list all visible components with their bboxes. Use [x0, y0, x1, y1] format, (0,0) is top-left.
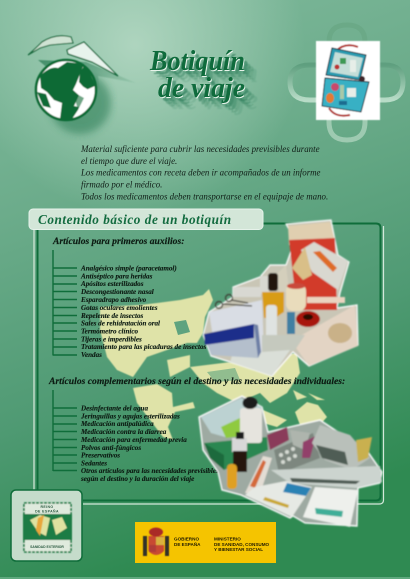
small vials — [266, 305, 277, 343]
photo: first aid supplies — [203, 220, 358, 376]
logo: globe with wings — [28, 36, 136, 134]
syringe packs — [271, 466, 382, 488]
list 1 text: Tijeras e imperdibles — [81, 336, 142, 344]
blue sheet — [245, 481, 312, 517]
photo: open first-aid bag — [316, 41, 380, 120]
intro text: firmado por el médico. — [81, 180, 162, 190]
yellow vial — [227, 464, 237, 489]
title shadow: de viaje — [171, 85, 258, 116]
title shadow: de viaje — [168, 82, 255, 114]
white box with scissors — [209, 300, 264, 352]
green box — [204, 437, 268, 470]
list 1 text: Tratamiento para las picaduras de insectos — [81, 343, 207, 351]
seal: sanidad exterior: REINO — [40, 505, 54, 509]
tape roll — [286, 284, 306, 311]
government logo — [135, 522, 276, 563]
heading: primeros auxilios: Artículos para primeros auxilios: — [52, 236, 184, 247]
intro text: Todos los medicamentos deben transportarse en el equipaje de mano. — [81, 192, 328, 202]
white outline silhouette — [199, 396, 382, 526]
coat of arms — [143, 528, 169, 556]
heading: complementarios: Artículos complementarios según el destino y las necesidades individuales: — [48, 376, 345, 387]
list 2 text: Medicación antipalúdica — [80, 420, 154, 428]
list 2 text: Polvos anti-fúngicos — [81, 444, 141, 452]
seal: sanidad exterior: DE ESPAÑA — [35, 508, 59, 514]
header: contenido básico: Contenido básico de un botiquín — [38, 212, 232, 227]
red disk — [296, 311, 320, 327]
small dark bottle — [232, 438, 247, 452]
title: de viaje — [159, 74, 246, 105]
gov text — [174, 536, 270, 552]
frame — [34, 224, 384, 504]
list 1 text: Analgésico simple (paracetamol) — [80, 264, 177, 272]
title shadow: de viaje — [165, 80, 252, 111]
title shadow — [153, 50, 258, 116]
intro text: Material suficiente para cubrir las necesidades previsibles durante — [80, 144, 320, 154]
blister packs — [267, 427, 289, 450]
title shadow: Botiquín — [153, 50, 249, 81]
list 1 text: Apósitos esterilizados — [80, 280, 144, 288]
seal: sanidad exterior — [11, 490, 82, 561]
gov text: DE ESPAÑA — [174, 541, 201, 547]
foil packet — [312, 425, 370, 470]
gov text: GOBIERNO — [174, 536, 199, 542]
list 1 text: Antiséptico para heridas — [80, 272, 153, 280]
wing right — [67, 42, 118, 76]
list 2 text: Desinfectante del agua — [80, 404, 148, 412]
title — [149, 46, 258, 116]
wing left — [28, 36, 73, 55]
list 2 text: Medicación contra la diarrea — [80, 428, 167, 436]
list 2 text: Sedantes — [81, 460, 107, 468]
title shadow: Botiquín — [162, 58, 258, 89]
title shadow: de viaje — [162, 77, 249, 108]
world map — [100, 289, 327, 440]
bandage sheet — [291, 305, 358, 366]
list 1 text: Sales de rehidratación oral — [81, 320, 160, 328]
header: contenido básico — [29, 209, 263, 230]
blue box — [203, 324, 258, 358]
title shadow: Botiquín — [159, 56, 255, 86]
seal: sanidad exterior: SANIDAD EXTERIOR — [30, 545, 64, 549]
list 2 text: Preservativos — [81, 452, 120, 460]
list 1 text: Vendas — [81, 351, 102, 359]
list 1 text: Termómetro clínico — [81, 328, 139, 336]
title: de viaje — [158, 73, 245, 104]
list 2 text: Medicación para enfermedad previa — [80, 436, 187, 444]
tilted white packet with plaster — [301, 242, 348, 290]
intro text: el tiempo que dure el viaje. — [81, 156, 177, 166]
list 1 text: Descongestionante nasal — [80, 288, 154, 296]
list 2 text: según el destino y la duración del viaje — [80, 475, 194, 483]
bottles — [276, 265, 289, 295]
logo shadow — [38, 60, 136, 134]
list 2 text — [80, 404, 219, 483]
gov text: DE SANIDAD, CONSUMO — [214, 542, 270, 547]
list 1 text — [80, 264, 207, 359]
silhouette — [203, 220, 358, 376]
tray — [201, 398, 262, 437]
gov text: Y BIENESTAR SOCIAL — [214, 547, 263, 552]
list 1 text: Gotas oculares emolientes — [81, 304, 158, 312]
title: Botiquín — [150, 47, 246, 78]
photo: complementary supplies — [199, 396, 382, 527]
list 1 text: Esparadrapo adhesivo — [80, 296, 147, 304]
intro text: Los medicamentos con receta deben ir acompañados de un informe — [80, 168, 321, 178]
list 2 text: Jeringuillas y agujas esterilizadas — [80, 412, 180, 420]
list 1 text: Repelente de insectos — [80, 312, 143, 320]
bracket list 1 — [53, 250, 77, 356]
list 2 text: Otros artículos para las necesidades previsibles — [81, 467, 219, 475]
title shadow: Botiquín — [156, 53, 252, 84]
envelope — [303, 487, 358, 527]
bracket list 2 — [53, 390, 77, 471]
gov text: MINISTERIO — [214, 536, 241, 542]
globe — [36, 60, 96, 120]
white bottle — [240, 408, 262, 443]
title: Botiquín — [149, 46, 245, 77]
orange blister sheet — [245, 456, 272, 494]
gauze — [262, 335, 305, 358]
decorative medical cross outline — [290, 25, 403, 140]
intro text — [80, 144, 328, 202]
Hudson bay and inland seas — [174, 320, 240, 382]
packet cream and red — [288, 222, 335, 245]
